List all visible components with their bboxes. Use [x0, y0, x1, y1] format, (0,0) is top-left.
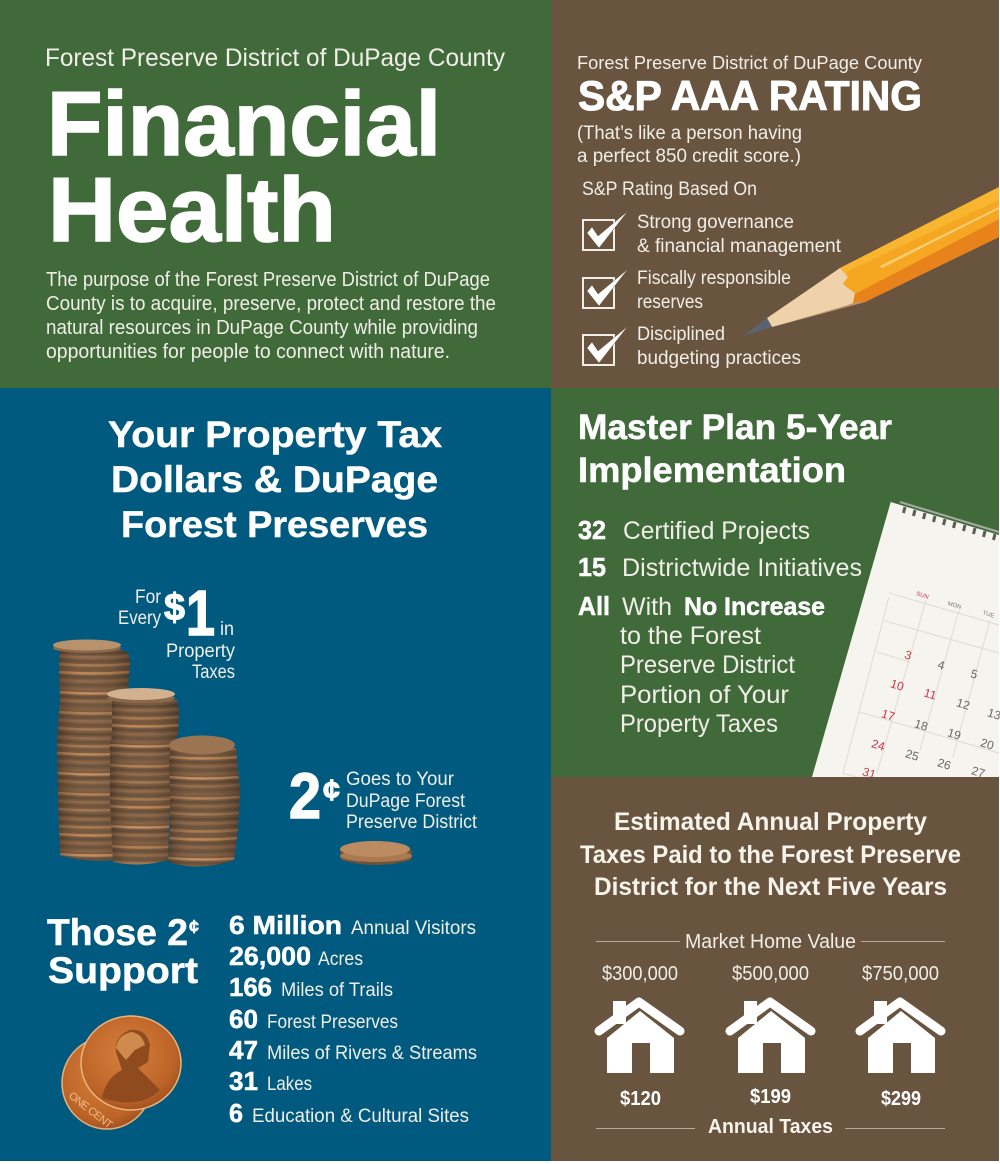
column: $500,000 home: $199	[750, 1086, 791, 1108]
illustration: wall calendar: 19	[946, 726, 963, 743]
column: $500,000 home: $500,000	[732, 963, 809, 985]
stat: education and cultural sites: 6	[229, 1098, 243, 1128]
illustration: wall calendar: 24	[870, 737, 887, 754]
checklist item 1: Strong governance	[637, 212, 794, 233]
illustration: wall calendar: MON	[947, 601, 962, 611]
stat: lakes	[229, 1066, 312, 1096]
stat: no increase: Preserve District	[620, 651, 795, 679]
stat: acres: 26,000	[229, 941, 311, 971]
column: $300,000 home: $300,000	[602, 963, 678, 985]
illustration: two pennies: ONE CENT	[66, 1090, 115, 1132]
2 cents goes to district: Preserve District	[346, 812, 478, 833]
for every $1 in property taxes: Property	[166, 641, 235, 662]
property tax heading	[108, 414, 442, 545]
stat: lakes: Lakes	[267, 1074, 312, 1095]
stat: certified projects: Certified Projects	[623, 517, 810, 545]
stat: miles of trails	[229, 972, 393, 1002]
column: $500,000 home	[730, 963, 811, 1108]
checklist item 1	[583, 211, 842, 257]
column: $750,000 home	[860, 963, 941, 1110]
master plan heading: Master Plan 5-Year	[578, 408, 892, 447]
stat: certified projects: 32	[578, 515, 606, 545]
checklist item 3	[583, 324, 801, 369]
illustration: wall calendar: 12	[955, 696, 972, 713]
illustration: wall calendar: TUE	[982, 610, 995, 620]
stat: no increase: to the Forest	[620, 622, 761, 650]
for every $1 in property taxes	[118, 577, 235, 683]
column: $750,000 home: $750,000	[862, 963, 939, 985]
illustration: wall calendar: 5	[969, 667, 980, 682]
property tax heading: Dollars & DuPage	[111, 459, 438, 500]
stat: no increase: Portion of Your	[620, 681, 789, 709]
illustration: two pennies	[62, 1016, 181, 1132]
2 cents goes to district: 2	[289, 760, 321, 832]
for every $1 in property taxes: $	[164, 587, 185, 629]
panel: financial health intro	[0, 0, 551, 388]
illustration: two pennies stacked	[340, 841, 412, 865]
stat: rivers and streams: 47	[229, 1035, 258, 1065]
illustration: wall calendar: 26	[936, 756, 953, 773]
taxes heading	[580, 808, 961, 901]
property tax heading: Forest Preserves	[121, 504, 428, 545]
taxes heading: District for the Next Five Years	[594, 873, 947, 901]
purpose paragraph: opportunities for people to connect with nature.	[46, 341, 450, 363]
stat: no increase: Property Taxes	[620, 710, 778, 738]
illustration: wall calendar: 25	[904, 747, 921, 764]
stat: districtwide initiatives: Districtwide Initiatives	[622, 554, 862, 582]
illustration: wall calendar: 31	[861, 765, 878, 782]
column: $300,000 home: $120	[620, 1088, 661, 1110]
purpose paragraph	[46, 269, 496, 363]
stat: annual visitors: Annual Visitors	[351, 918, 476, 939]
panel: S&P AAA rating	[551, 0, 999, 388]
property tax heading: Your Property Tax	[108, 414, 442, 455]
rating basis heading: S&P Rating Based On	[582, 179, 757, 200]
stat: districtwide initiatives: 15	[578, 552, 606, 582]
illustration: wall calendar: 10	[889, 677, 906, 694]
stat: no increase: With	[622, 593, 672, 621]
taxes heading: Estimated Annual Property	[614, 808, 927, 836]
illustration: wall calendar: SUN	[915, 591, 929, 601]
those 2 cents support heading: Support	[48, 950, 198, 991]
column: $750,000 home: $299	[881, 1088, 921, 1110]
purpose paragraph: The purpose of the Forest Preserve District of DuPage	[46, 269, 490, 291]
illustration: wall calendar: 11	[922, 686, 938, 703]
credit score note	[577, 123, 802, 167]
for every $1 in property taxes: 1	[186, 577, 215, 649]
2 cents goes to district: ¢	[323, 774, 340, 807]
rating district name: Forest Preserve District of DuPage County	[577, 52, 923, 73]
for every $1 in property taxes: For	[135, 587, 162, 608]
those 2 cents support heading	[47, 912, 199, 991]
illustration: wall calendar: 3	[903, 648, 914, 663]
taxes heading: Taxes Paid to the Forest Preserve	[580, 841, 961, 869]
stat: education and cultural sites: Education & Cultural Sites	[252, 1106, 469, 1127]
illustration: wall calendar: 17	[880, 707, 897, 724]
stat: annual visitors: 6 Million	[229, 910, 342, 940]
title: Financial	[47, 74, 441, 175]
master plan heading: Implementation	[578, 451, 846, 490]
stat: no increase: All	[578, 591, 610, 621]
stat: forest preserves: 60	[229, 1004, 258, 1034]
stat: acres: Acres	[318, 949, 363, 970]
panel: property tax dollars	[0, 388, 551, 1161]
checklist item 2: Fiscally responsible	[637, 268, 791, 289]
2 cents goes to district: DuPage Forest	[346, 791, 466, 812]
purpose paragraph: natural resources in DuPage County while providing	[46, 317, 478, 339]
panel: estimated annual property taxes	[551, 777, 999, 1161]
stat: education and cultural sites	[229, 1098, 469, 1128]
title: Health	[48, 160, 336, 261]
title	[47, 74, 441, 261]
stat: forest preserves: Forest Preserves	[267, 1012, 398, 1033]
icon: pencil	[743, 187, 999, 336]
credit score note: a perfect 850 credit score.)	[577, 146, 801, 167]
checklist item 1: & financial management	[637, 236, 842, 257]
district name: Forest Preserve District of DuPage County	[45, 44, 505, 72]
illustration: wall calendar: 20	[979, 736, 996, 753]
purpose paragraph: County is to acquire, preserve, protect and restore the	[46, 293, 496, 315]
column: $300,000 home	[599, 963, 680, 1110]
stat: no increase: No Increase	[684, 593, 825, 621]
market home value label: Market Home Value	[685, 931, 856, 953]
stat: miles of trails: Miles of Trails	[281, 980, 393, 1001]
panel: master plan	[551, 388, 1000, 782]
2 cents goes to district: Goes to Your	[346, 769, 455, 790]
for every $1 in property taxes: in	[220, 619, 234, 640]
2 cents goes to district	[289, 760, 478, 833]
stat: lakes: 31	[229, 1066, 258, 1096]
checklist item 3: budgeting practices	[637, 348, 801, 369]
stat: annual visitors	[229, 910, 476, 940]
stat: rivers and streams: Miles of Rivers & Streams	[267, 1043, 477, 1064]
annual taxes label: Annual Taxes	[708, 1116, 833, 1138]
those 2 cents support heading: Those 2	[47, 912, 188, 953]
stat: miles of trails: 166	[229, 972, 272, 1002]
those 2 cents support heading: ¢	[189, 917, 199, 937]
illustration: wall calendar: 4	[936, 658, 947, 673]
illustration: wall calendar	[812, 502, 1000, 782]
stat: rivers and streams	[229, 1035, 477, 1065]
stat: forest preserves	[229, 1004, 398, 1034]
checklist item 2: reserves	[637, 292, 703, 313]
for every $1 in property taxes: Every	[118, 608, 161, 629]
stat: acres	[229, 941, 363, 971]
master plan heading	[578, 408, 892, 490]
rating heading: S&P AAA RATING	[578, 72, 922, 119]
illustration: wall calendar: 18	[913, 717, 930, 734]
illustration: three penny stacks	[53, 640, 240, 867]
checklist item 3: Disciplined	[637, 324, 725, 345]
checklist item 2	[583, 268, 791, 313]
stat: no increase	[578, 591, 825, 738]
for every $1 in property taxes: Taxes	[192, 662, 235, 683]
credit score note: (That’s like a person having	[577, 123, 802, 144]
illustration: wall calendar: 27	[970, 764, 987, 781]
